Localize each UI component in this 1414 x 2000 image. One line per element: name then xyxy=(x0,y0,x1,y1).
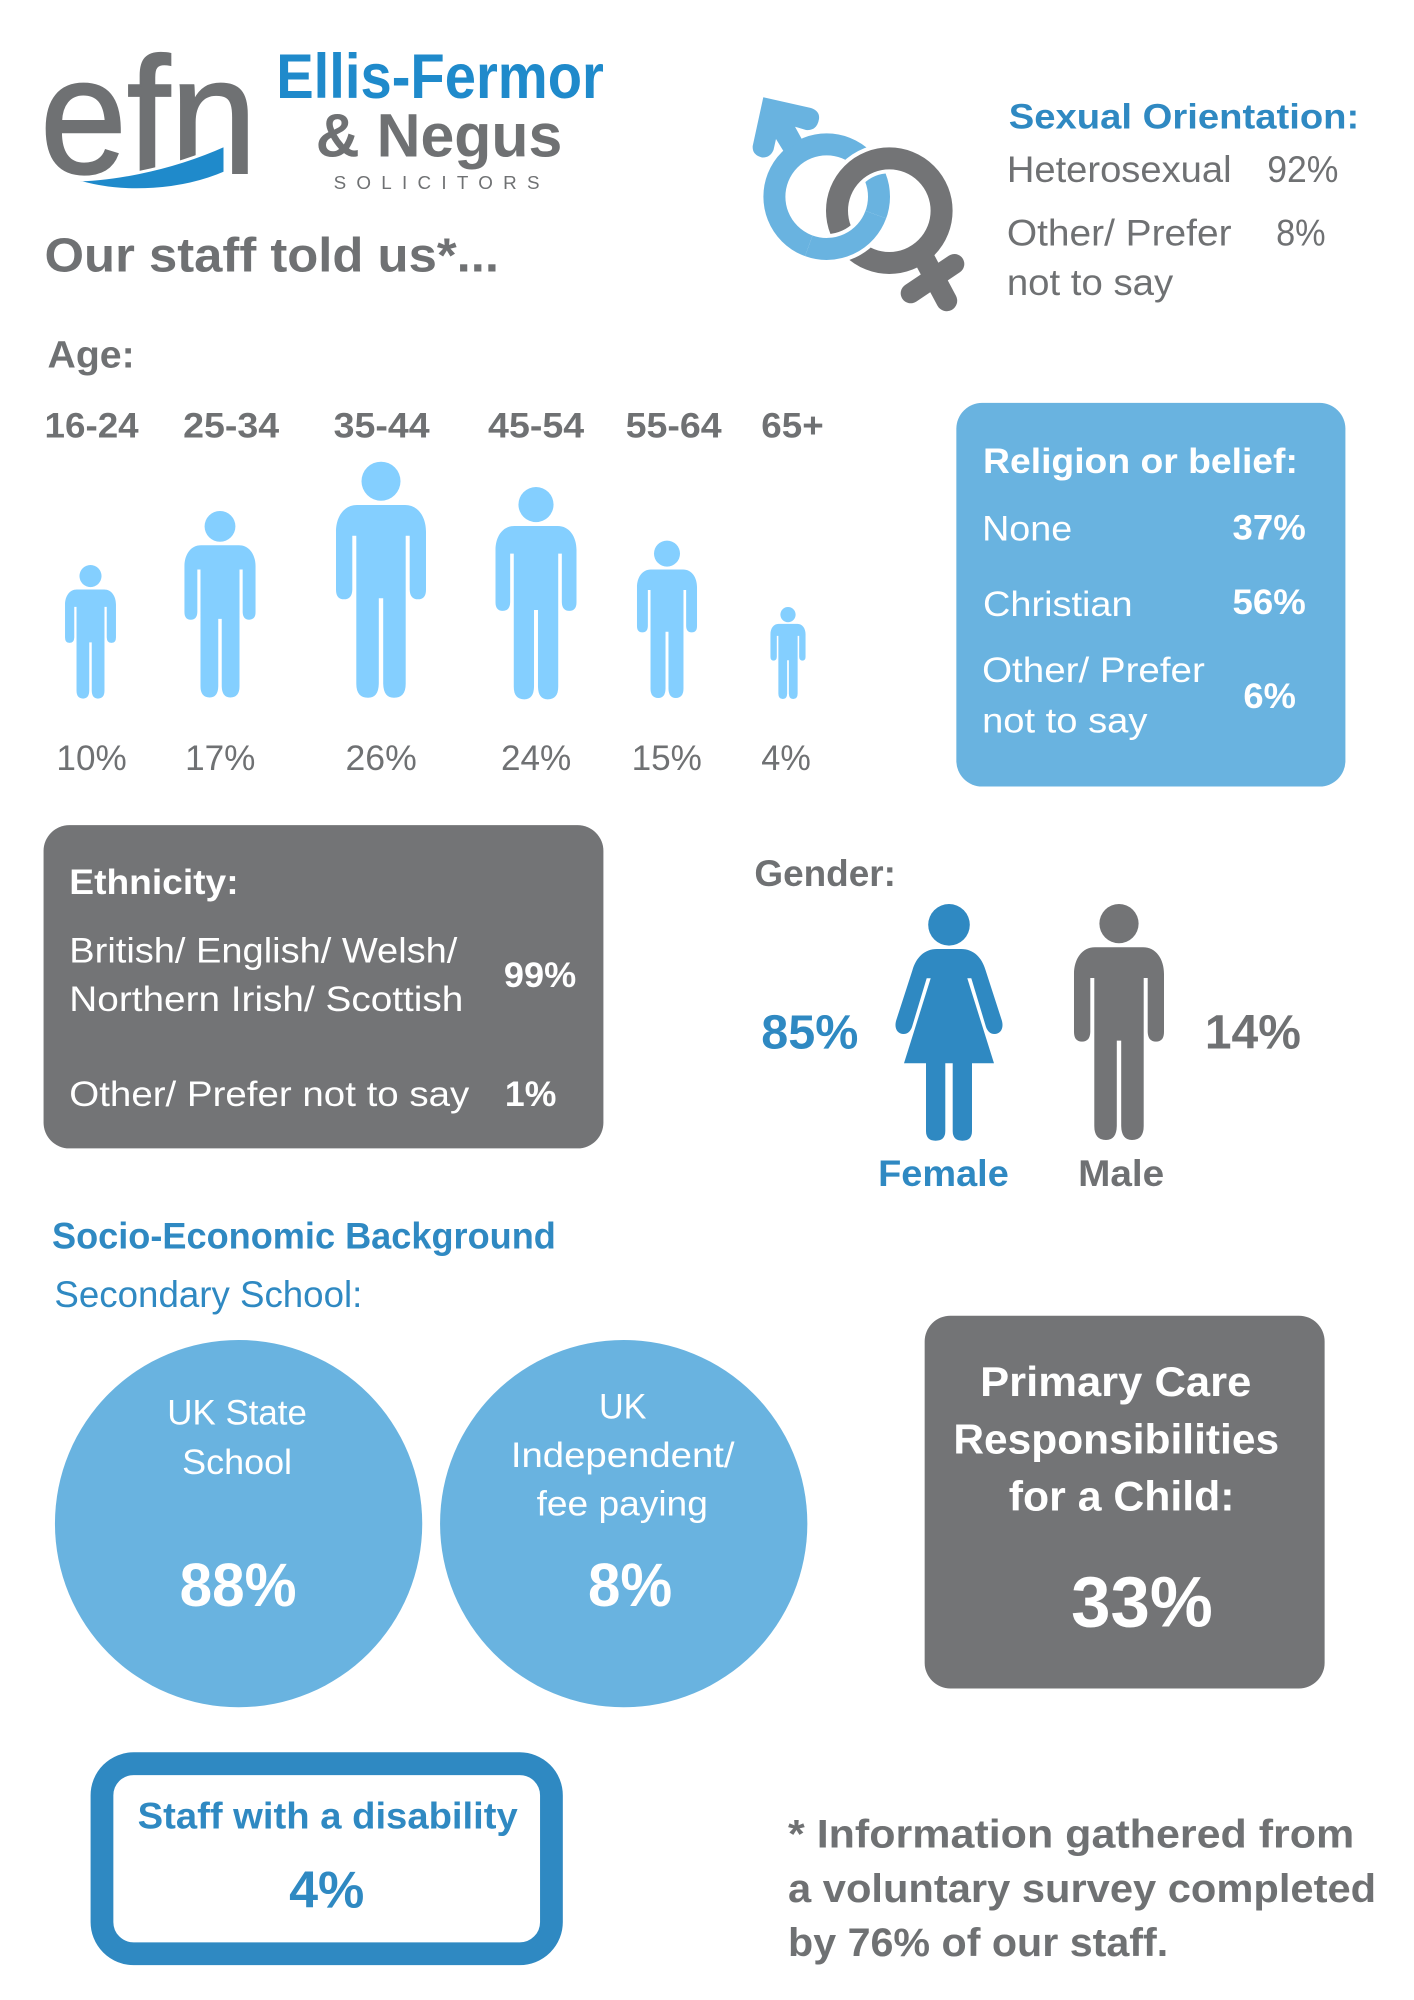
age labels: 45-54 xyxy=(488,406,584,446)
footnote: by 76% of our staff. xyxy=(788,1921,1168,1965)
age percentages: 15% xyxy=(632,738,702,778)
value: 99%: 99% xyxy=(504,955,576,995)
value: 56%: 56% xyxy=(1233,582,1306,622)
heading: primary care line 1: Primary Care xyxy=(980,1358,1251,1405)
icon: female figure xyxy=(895,904,1003,1141)
value: 37%: 37% xyxy=(1233,508,1306,548)
value: 8%: 8% xyxy=(1276,213,1326,254)
panel: religion or belief xyxy=(956,403,1345,787)
footnote: * Information gathered from xyxy=(788,1812,1354,1856)
heading: gender: Gender: xyxy=(754,853,896,894)
age labels: 35-44 xyxy=(334,406,430,446)
panel: primary care responsibilities xyxy=(925,1316,1325,1688)
heading: religion: Religion or belief: xyxy=(983,441,1298,481)
row: other: Other/ Prefer xyxy=(1007,213,1232,254)
subheading: secondary school: Secondary School: xyxy=(54,1274,362,1315)
age percentages: 26% xyxy=(346,738,417,778)
row: none: None xyxy=(982,509,1072,549)
logo name: Solicitors: SOLICITORS xyxy=(334,172,540,193)
circle: UK independent school: 8% xyxy=(588,1551,672,1620)
age labels: 65+ xyxy=(761,406,824,446)
row: british line 1: British/ English/ Welsh/ xyxy=(69,930,457,970)
age percentages: 17% xyxy=(185,738,255,778)
circle: UK state school: 88% xyxy=(180,1551,297,1620)
panel background xyxy=(44,825,603,1148)
panel: sexual orientation xyxy=(1007,97,1359,303)
footnote: a voluntary survey completed xyxy=(788,1867,1376,1911)
panel: socio-economic background xyxy=(52,1215,807,1707)
value: 33%: 33% xyxy=(1071,1563,1213,1643)
logo: Ellis-Fermor & Negus Solicitors xyxy=(40,24,604,209)
age labels: 55-64 xyxy=(626,406,722,446)
logo name: & Negus: & Negus xyxy=(316,101,562,170)
icon: male figure xyxy=(1074,904,1164,1140)
age labels: 25-34 xyxy=(183,406,279,446)
age percentages: 24% xyxy=(501,738,571,778)
age percentages: 10% xyxy=(56,738,127,778)
heading: primary care line 3: for a Child: xyxy=(1009,1473,1235,1520)
row: not to say: not to say xyxy=(982,701,1148,741)
panel: age xyxy=(45,333,824,778)
icon: interlocked male and female symbols xyxy=(753,97,954,301)
row: heterosexual: Heterosexual xyxy=(1007,149,1232,190)
row: british line 2: Northern Irish/ Scottish xyxy=(69,979,463,1019)
value: 85%: 85% xyxy=(761,1005,858,1059)
circle: UK independent school: fee paying xyxy=(537,1484,708,1524)
footnote xyxy=(788,1812,1376,1965)
title: Our staff told us*... xyxy=(45,229,499,283)
value: 14%: 14% xyxy=(1205,1005,1301,1059)
row: other: Other/ Prefer not to say xyxy=(69,1074,469,1114)
label: male: Male xyxy=(1078,1153,1164,1194)
heading: socio-economic background: Socio-Economic Background xyxy=(52,1215,556,1256)
value: 92%: 92% xyxy=(1267,149,1338,190)
heading: primary care line 2: Responsibilities xyxy=(953,1415,1279,1462)
age percentages: 4% xyxy=(761,738,811,778)
row: christian: Christian xyxy=(983,584,1133,624)
label: staff with a disability: Staff with a disability xyxy=(138,1796,518,1837)
row: not to say: not to say xyxy=(1007,262,1174,303)
label: female: Female xyxy=(878,1153,1009,1194)
outlined box xyxy=(102,1764,551,1954)
heading: ethnicity: Ethnicity: xyxy=(69,862,239,902)
value: 4%: 4% xyxy=(289,1861,364,1919)
logo name: Ellis-Fermor: Ellis-Fermor xyxy=(276,42,604,112)
logo mark: efn: efn xyxy=(40,24,257,209)
value: 6%: 6% xyxy=(1243,676,1296,716)
circle: UK state school: School xyxy=(182,1442,292,1482)
panel background xyxy=(925,1316,1325,1688)
circle: UK state school: UK State xyxy=(167,1393,307,1433)
circle: UK state school xyxy=(55,1340,422,1707)
age figures xyxy=(65,462,806,699)
panel background xyxy=(956,403,1345,787)
value: 1%: 1% xyxy=(505,1074,556,1114)
panel: disability xyxy=(102,1764,551,1954)
heading: sexual orientation: Sexual Orientation: xyxy=(1009,97,1359,137)
panel: ethnicity xyxy=(44,825,603,1148)
circle: UK independent school: Independent/ xyxy=(511,1435,735,1475)
panel: gender xyxy=(754,853,1301,1194)
age labels xyxy=(45,406,824,446)
age percentages xyxy=(56,738,811,778)
age labels: 16-24 xyxy=(45,406,139,446)
circle: UK independent school xyxy=(440,1340,807,1707)
row: other: Other/ Prefer xyxy=(982,650,1205,690)
heading: age: Age: xyxy=(48,333,135,375)
circle: UK independent school: UK xyxy=(599,1387,647,1427)
